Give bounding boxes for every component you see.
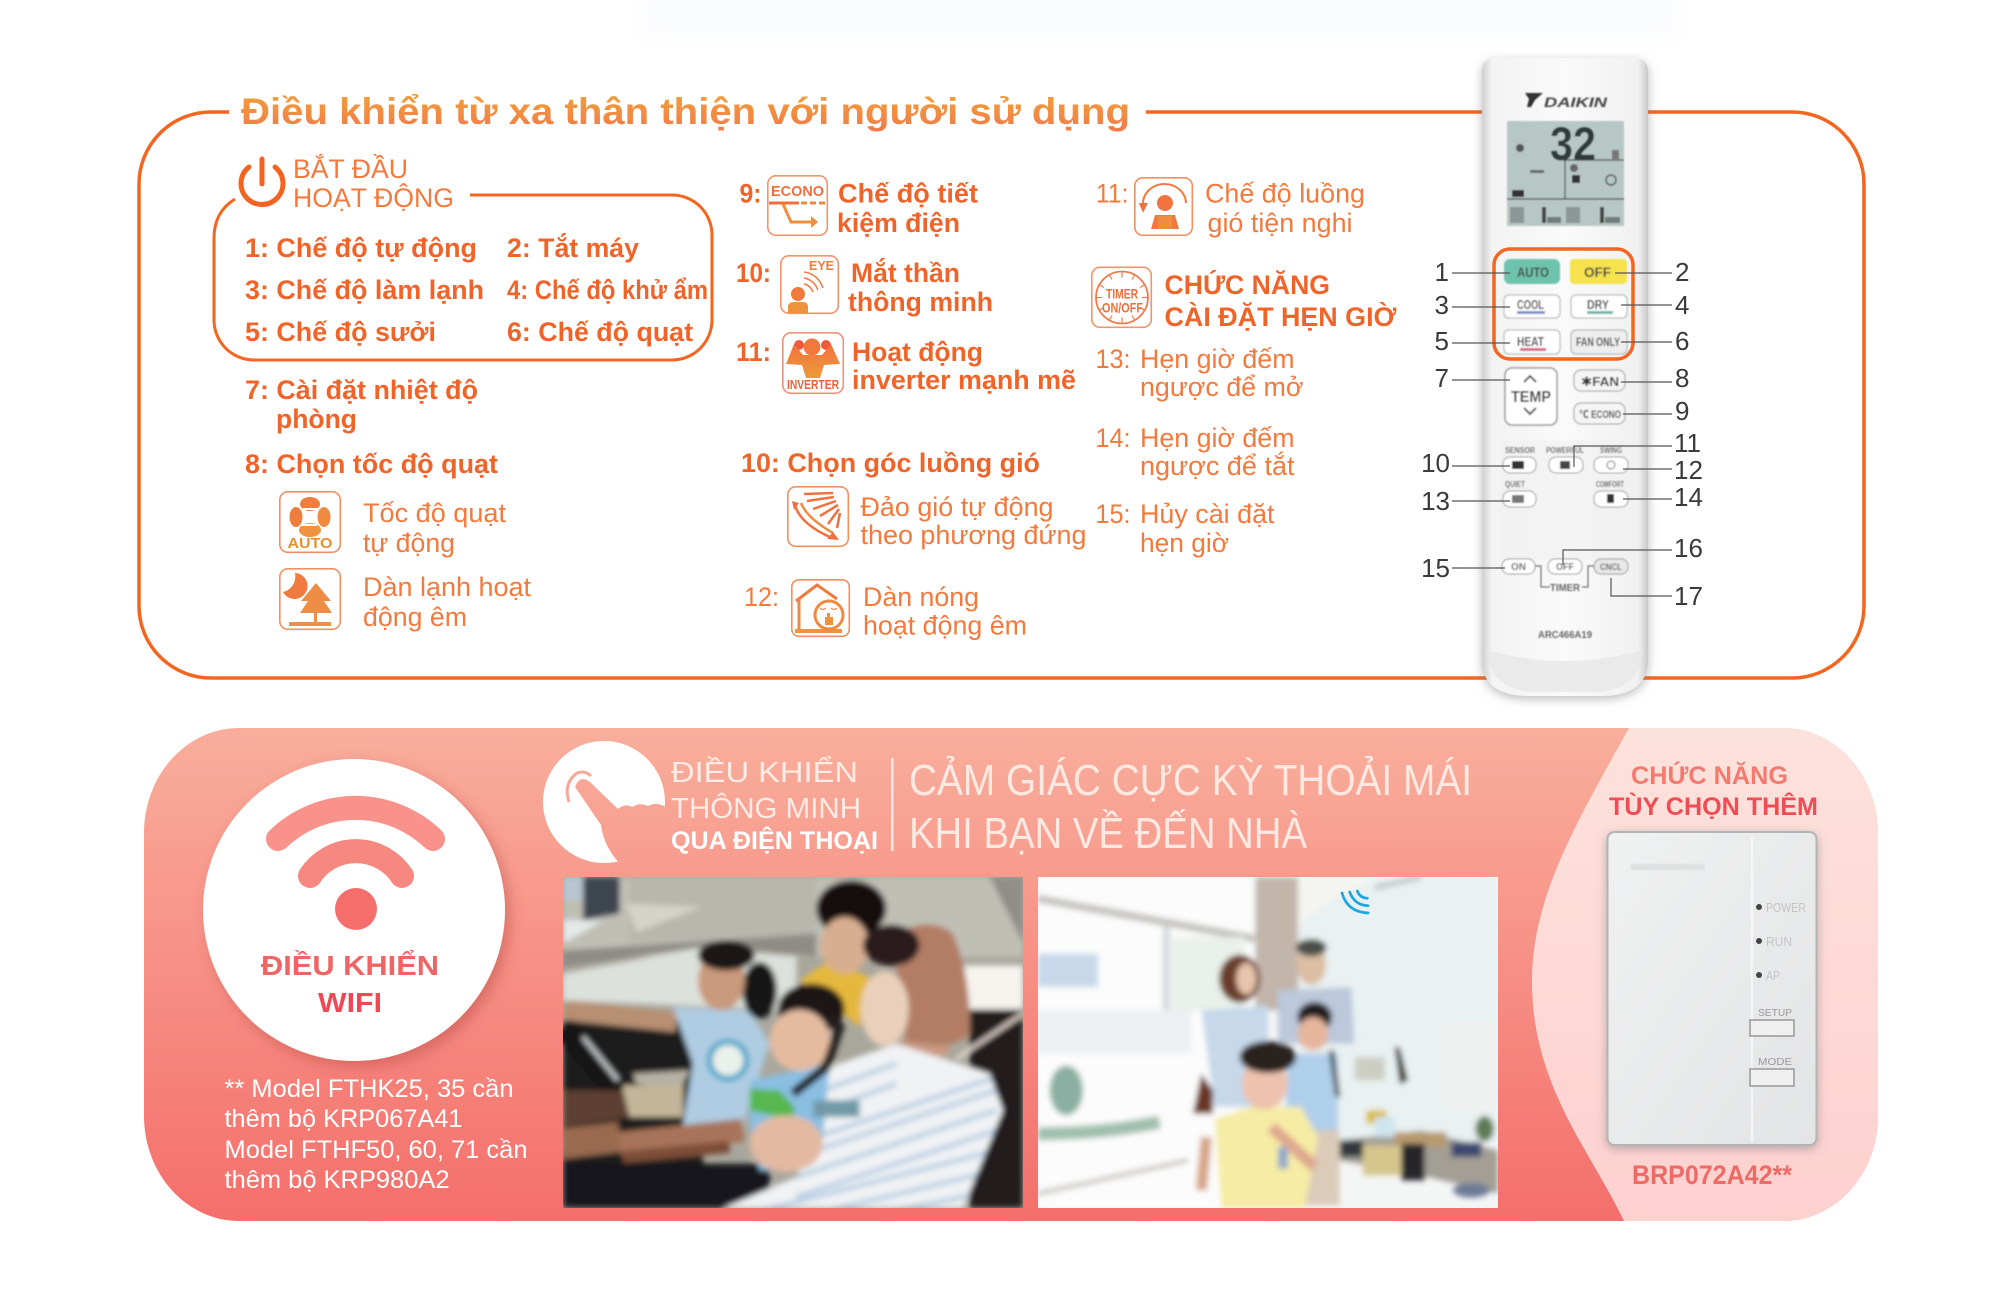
- device: wifi adapter: SETUP: [1758, 1008, 1792, 1019]
- text block: mode list: [245, 232, 708, 347]
- model label: ARC466A19: [1538, 630, 1592, 641]
- heading: smart phone control: QUA ĐIỆN THOẠI: [671, 825, 878, 855]
- icon: wifi: [278, 808, 433, 930]
- panel: optional accessory: [1608, 760, 1818, 1190]
- text block: auto fan speed: [363, 498, 506, 558]
- leader lines: [1452, 273, 1672, 596]
- device: wifi adapter: AP: [1766, 968, 1780, 983]
- text block: item 15: 15:: [1096, 499, 1130, 529]
- text block: comfort airflow: [1205, 178, 1365, 238]
- text block: econo mode: [837, 178, 978, 238]
- text block: econo mode: kiệm điện: [837, 208, 960, 238]
- icon: power: [241, 159, 283, 204]
- text block: item 13: 13:: [1096, 344, 1130, 374]
- right numbers: 8: [1675, 363, 1689, 393]
- label: item 9: 9:: [740, 178, 762, 208]
- label: item 11 inverter: 11:: [736, 337, 771, 367]
- text block: quiet indoor unit: Dàn lạnh hoạt: [363, 572, 531, 602]
- small function buttons: SENSOR: [1505, 446, 1535, 455]
- text block: swing: Đảo gió tự động: [860, 492, 1054, 522]
- text block: quiet outdoor unit: hoạt động êm: [863, 610, 1027, 640]
- text block: model note: thêm bộ KRP067A41: [224, 1105, 462, 1133]
- lcd screen: [1507, 117, 1624, 226]
- mode button highlight box: [1494, 249, 1633, 359]
- icon: vertical swing: [788, 487, 848, 546]
- text block: model note: [224, 1075, 528, 1194]
- timer buttons: [1502, 559, 1628, 594]
- text block: item 14: 14:: [1096, 423, 1130, 453]
- icon: auto fan: [280, 492, 340, 552]
- icon: timer: [1092, 267, 1151, 327]
- right numbers: [1674, 257, 1703, 611]
- icon: comfort airflow: [1135, 178, 1192, 235]
- fan and econo buttons: ℃ ECONO: [1579, 409, 1621, 421]
- text block: item 15: Hủy cài đặt: [1140, 499, 1275, 529]
- text block: comfort airflow: gió tiện nghi: [1208, 208, 1352, 238]
- right numbers: 17: [1674, 581, 1703, 611]
- heading: comfort when coming home: KHI BẠN VỀ ĐẾN NHÀ: [909, 808, 1308, 858]
- fan and econo buttons: [1574, 370, 1625, 424]
- heading: start operation: [293, 153, 454, 213]
- text block: item 8: 8: Chọn tốc độ quạt: [245, 449, 498, 479]
- icon: smart touch hand: [543, 741, 672, 870]
- faint background photo residue: [640, 0, 1680, 40]
- left numbers: 3: [1435, 290, 1449, 320]
- photo: family at home: [1038, 877, 1498, 1208]
- group: start operation modes: [214, 153, 712, 360]
- text block: intelligent eye: [848, 257, 993, 317]
- photo: family using phone in car: [563, 877, 1023, 1208]
- heading: optional function: [1609, 760, 1818, 821]
- banner background: [144, 728, 1878, 1221]
- text block: comfort airflow: Chế độ luồng: [1205, 178, 1365, 208]
- text block: model note: ** Model FTHK25, 35 cần: [224, 1075, 514, 1103]
- heading: comfort when coming home: [909, 755, 1472, 858]
- small function buttons: QUIET: [1505, 480, 1525, 489]
- left numbers: [1421, 257, 1450, 583]
- text block: inverter: Hoạt động: [852, 337, 983, 367]
- text block: item 14: [1096, 423, 1295, 481]
- left numbers: 5: [1435, 326, 1449, 356]
- box: operation modes frame: [214, 195, 712, 360]
- icon: timer: TIMER: [1106, 286, 1138, 302]
- right numbers: 9: [1675, 396, 1689, 426]
- text block: inverter: [852, 337, 1076, 395]
- text block: intelligent eye: Mắt thần: [851, 257, 960, 288]
- lcd screen: 32: [1550, 117, 1596, 170]
- text block: model note: thêm bộ KRP980A2: [224, 1166, 450, 1194]
- icon: timer: ON/OFF: [1102, 300, 1143, 316]
- mode buttons: HEAT: [1517, 334, 1544, 349]
- text block: item 13: ngược để mở: [1140, 372, 1304, 402]
- remote body: [1482, 58, 1648, 696]
- text block: item 13: [1096, 344, 1304, 402]
- label: wifi control: ĐIỀU KHIỂN: [261, 950, 439, 981]
- text block: item 14: ngược để tắt: [1140, 450, 1295, 481]
- heading: timer functions: CHỨC NĂNG: [1164, 269, 1330, 300]
- right numbers: 4: [1675, 290, 1689, 320]
- label: wifi control: WIFI: [318, 987, 382, 1018]
- timer buttons: TIMER: [1550, 583, 1581, 594]
- text block: item 7: phòng: [276, 404, 357, 434]
- icon: auto fan: AUTO: [288, 535, 333, 552]
- device: wifi adapter: RUN: [1766, 934, 1792, 949]
- text block: mode list: 4: Chế độ khử ẩm: [507, 275, 708, 305]
- left numbers: 7: [1435, 363, 1449, 393]
- text block: item 15: [1096, 499, 1275, 558]
- text block: item 14: Hẹn giờ đếm: [1140, 423, 1294, 453]
- small function buttons: COMFORT: [1596, 480, 1624, 489]
- wifi badge: [203, 759, 505, 1061]
- timer buttons: ON: [1511, 562, 1526, 573]
- text block: auto fan speed: Tốc độ quạt: [363, 498, 506, 528]
- temp button: [1505, 368, 1557, 425]
- icon: inverter: INVERTER: [787, 377, 839, 392]
- text block: quiet indoor unit: động êm: [363, 602, 467, 632]
- small function buttons: SWING: [1600, 446, 1622, 455]
- heading: smart phone control: THÔNG MINH: [671, 791, 861, 825]
- white circle: [203, 759, 505, 1061]
- icon: intelligent eye: EYE: [809, 258, 834, 273]
- text block: mode list: 5: Chế độ sưởi: [245, 317, 436, 347]
- right numbers: 11: [1674, 428, 1701, 458]
- icon: inverter: [783, 333, 843, 393]
- text block: item 13: Hẹn giờ đếm: [1140, 344, 1294, 374]
- label: wifi control: [261, 950, 439, 1018]
- heading: optional function: CHỨC NĂNG: [1631, 760, 1788, 790]
- timer buttons: CNCL: [1600, 562, 1622, 572]
- text block: item 7: 7: Cài đặt nhiệt độ: [245, 375, 478, 405]
- icon: intelligent eye: [781, 256, 838, 313]
- label: item 11 comfort: 11:: [1096, 178, 1128, 208]
- text block: intelligent eye: thông minh: [848, 287, 993, 317]
- text block: swing: [860, 492, 1086, 550]
- heading: timer functions: CÀI ĐẶT HẸN GIỜ: [1164, 301, 1396, 332]
- text block: quiet outdoor unit: Dàn nóng: [863, 582, 979, 612]
- heading: optional function: TÙY CHỌN THÊM: [1609, 791, 1818, 821]
- temp button: TEMP: [1511, 389, 1551, 406]
- heading: timer functions: [1164, 269, 1396, 332]
- text block: item 10 airflow: 10: Chọn góc luồng gió: [741, 448, 1040, 478]
- mode buttons: OFF: [1584, 264, 1611, 280]
- text block: item 7: [245, 375, 478, 434]
- label: model number: BRP072A42**: [1632, 1160, 1792, 1190]
- left numbers: 10: [1421, 448, 1450, 478]
- label: item 10 eye: 10:: [736, 258, 771, 288]
- text block: quiet indoor unit: [363, 572, 531, 632]
- callout leader lines and numbers: [1421, 257, 1703, 611]
- right numbers: 16: [1674, 533, 1703, 563]
- small function buttons: POWERFUL: [1546, 446, 1584, 455]
- right numbers: 12: [1674, 455, 1703, 485]
- right numbers: 6: [1675, 326, 1689, 356]
- mode buttons: [1504, 259, 1627, 354]
- heading: smart phone control: ĐIỀU KHIỂN: [671, 755, 858, 789]
- text block: mode list: 6: Chế độ quạt: [507, 317, 693, 347]
- left numbers: 1: [1435, 257, 1449, 287]
- label: item 12: 12:: [744, 582, 779, 612]
- panel: optional accessory background: [1532, 728, 1900, 1221]
- panel: wifi control banner: [144, 728, 1900, 1221]
- text block: mode list: 2: Tắt máy: [507, 232, 639, 263]
- text block: mode list: 1: Chế độ tự động: [245, 233, 477, 263]
- text block: item 15: hẹn giờ: [1140, 528, 1229, 558]
- right numbers: 14: [1674, 482, 1703, 512]
- device: wifi adapter: [1608, 832, 1816, 1145]
- right numbers: 2: [1675, 257, 1689, 287]
- text block: mode list: 3: Chế độ làm lạnh: [245, 275, 484, 305]
- daikin logo: [1525, 93, 1608, 110]
- text block: model note: Model FTHF50, 60, 71 cần: [224, 1136, 528, 1164]
- heading: comfort when coming home: CẢM GIÁC CỰC KỲ THOẢI MÁI: [909, 755, 1472, 805]
- left numbers: 15: [1421, 553, 1450, 583]
- icon: quiet indoor unit: [280, 569, 340, 629]
- title: Điều khiển từ xa thân thiện với người sử dụng: [241, 91, 1130, 132]
- small function buttons: [1500, 440, 1632, 560]
- fan and econo buttons: ✱FAN: [1581, 374, 1619, 389]
- left numbers: 13: [1421, 486, 1450, 516]
- icon: econo: ECONO: [771, 183, 824, 200]
- text block: econo mode: Chế độ tiết: [838, 178, 978, 208]
- daikin logo: DAIKIN: [1544, 94, 1608, 110]
- mode buttons: COOL: [1517, 297, 1544, 312]
- icon: wifi signal: [1342, 891, 1368, 913]
- device: wifi adapter: POWER: [1766, 900, 1806, 915]
- panel: remote control features outline: [139, 112, 1864, 678]
- timer buttons: OFF: [1556, 562, 1574, 573]
- remote control illustration: [1482, 58, 1648, 696]
- text block: auto fan speed: tự động: [363, 528, 455, 558]
- icon: quiet outdoor unit: [792, 580, 849, 636]
- text block: swing: theo phương đứng: [860, 520, 1086, 550]
- text block: quiet outdoor unit: [863, 582, 1027, 640]
- device: wifi adapter: MODE: [1758, 1057, 1792, 1068]
- mode buttons: FAN ONLY: [1576, 335, 1620, 349]
- heading: smart phone control: [671, 755, 878, 855]
- heading: start operation: BẮT ĐẦU: [293, 153, 408, 184]
- text block: inverter: inverter mạnh mẽ: [852, 365, 1076, 395]
- heading: start operation: HOẠT ĐỘNG: [293, 182, 454, 213]
- divider between headings: [891, 758, 894, 851]
- icon: econo: [768, 176, 827, 235]
- mode buttons: DRY: [1587, 297, 1609, 312]
- mode buttons: AUTO: [1517, 264, 1549, 280]
